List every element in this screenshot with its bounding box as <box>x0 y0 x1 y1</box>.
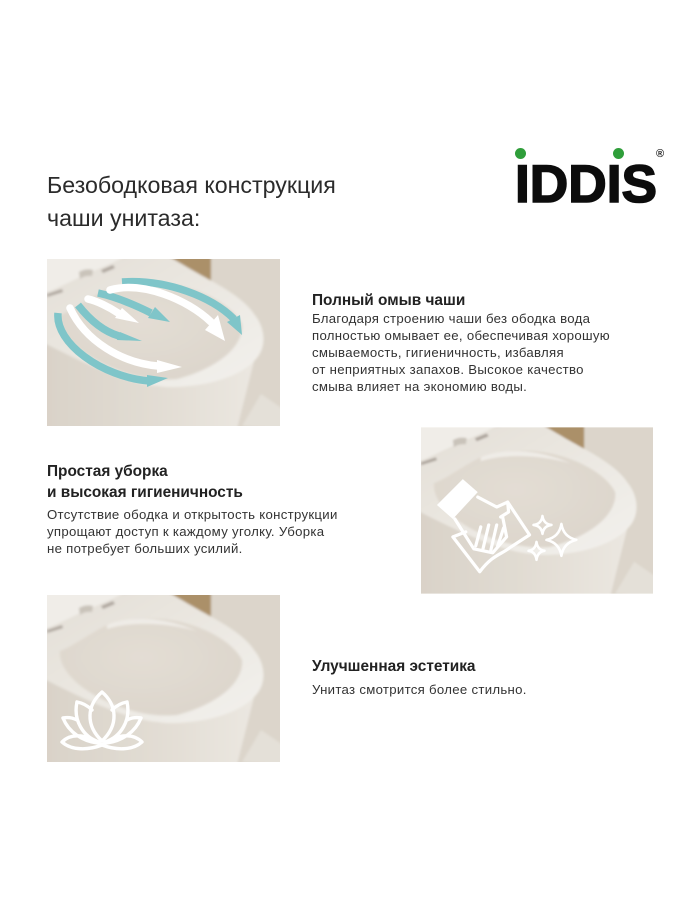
icon: sparkles <box>529 516 576 560</box>
description: easy cleaning: упрощают доступ к каждому уголку. Уборка <box>47 524 324 539</box>
description: improved aesthetics: Унитаз смотрится более стильно. <box>312 682 527 697</box>
text block: easy cleaning <box>47 463 338 556</box>
description: full rinse: полностью омывает ее, обеспечивая хорошую <box>312 328 610 343</box>
title: Безободковая конструкция <box>47 172 336 198</box>
description: full rinse <box>312 311 610 394</box>
description: full rinse: Благодаря строению чаши без ободка вода <box>312 311 590 326</box>
icon: white flow arrows <box>70 288 225 373</box>
description: full rinse: от неприятных запахов. Высокое качество <box>312 362 584 377</box>
description: full rinse: смываемость, гигиеничность, избавляя <box>312 345 564 360</box>
description: easy cleaning: Отсутствие ободка и открытость конструкции <box>47 507 338 522</box>
icon: teal water arrows <box>58 282 242 387</box>
logo: IDDIS: ® <box>656 148 664 160</box>
description: full rinse: смыва влияет на экономию воды. <box>312 379 527 394</box>
heading: full rinse: Полный омыв чаши <box>312 292 465 309</box>
description: easy cleaning <box>47 507 338 556</box>
title: чаши унитаза: <box>47 205 200 231</box>
icon: hand wiping with cloth <box>437 479 530 572</box>
heading: improved aesthetics: Улучшенная эстетика <box>312 658 475 675</box>
panel: full bowl rinse photo with arrows <box>47 259 280 426</box>
title <box>47 172 336 231</box>
icon: lotus <box>62 692 142 749</box>
panel: aesthetics photo with lotus icon <box>47 595 280 762</box>
panel: cleaning photo with hand icon <box>421 427 653 594</box>
heading: easy cleaning: Простая уборка <box>47 463 168 480</box>
text block: full rinse <box>312 292 610 394</box>
text block: improved aesthetics <box>312 658 527 697</box>
description: easy cleaning: не потребует больших усилий. <box>47 541 243 556</box>
heading: easy cleaning: и высокая гигиеничность <box>47 484 243 500</box>
heading: easy cleaning <box>47 463 243 500</box>
